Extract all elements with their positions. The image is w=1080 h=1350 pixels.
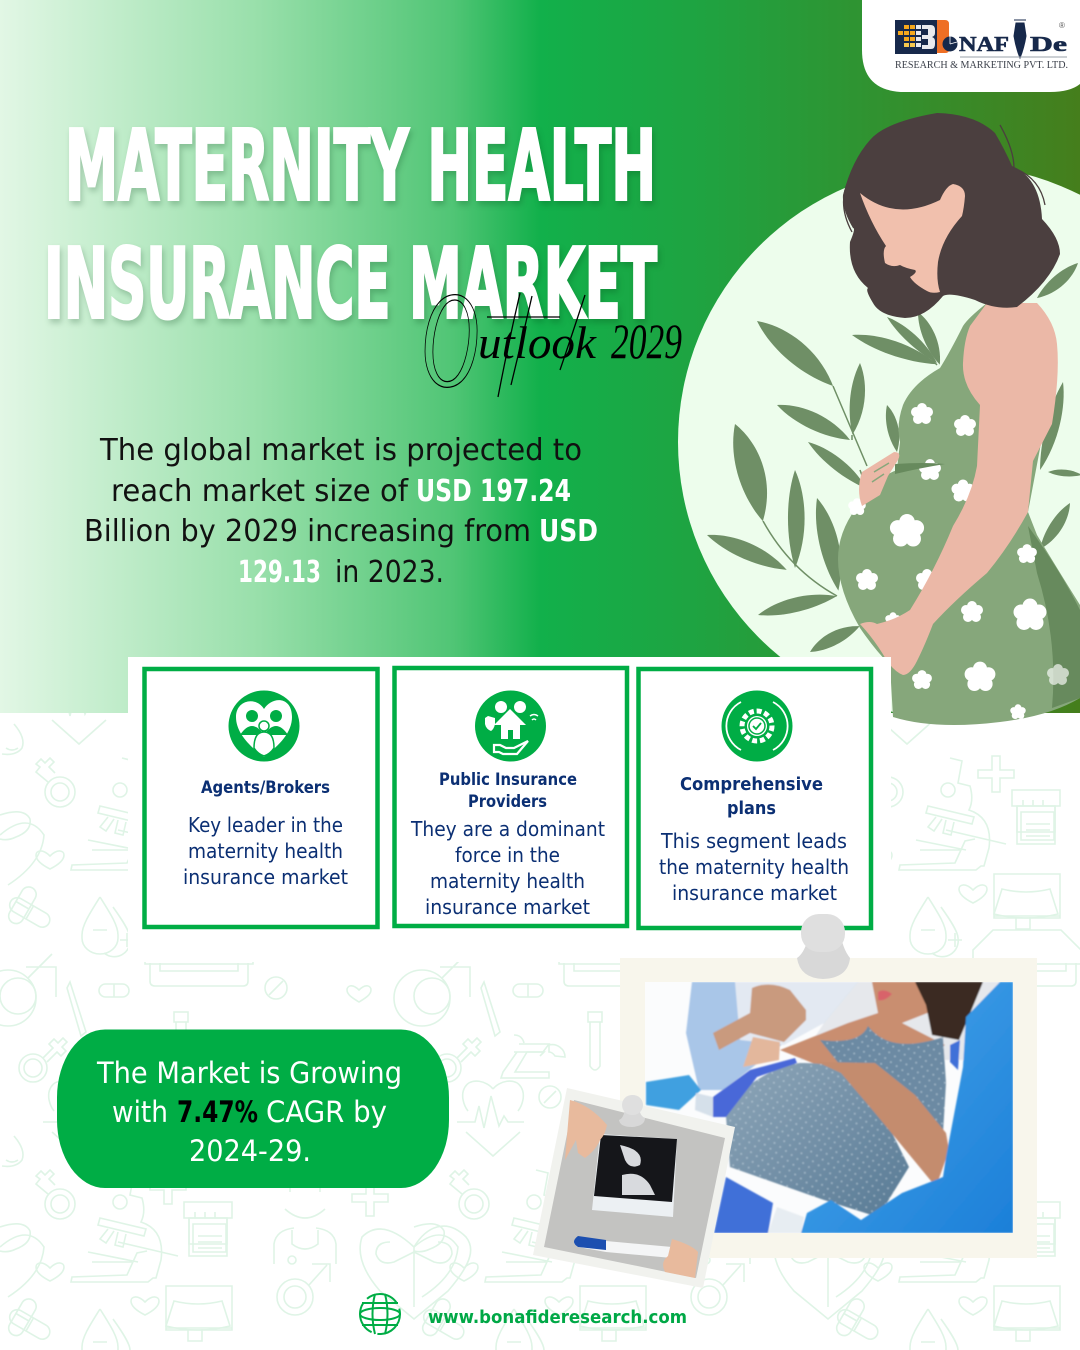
footer: globe icon and website [360,1294,687,1334]
icon: gear with check [722,690,792,762]
dress [838,303,1080,725]
CAGR pill callout: The Market is Growing [96,1056,402,1090]
CAGR pill callout: 2024-29. [189,1134,311,1168]
card: Agents/Brokers: maternity health [188,839,343,863]
card: Public Insurance Providers [394,668,627,926]
icon: globe [360,1294,400,1334]
card: Agents/Brokers: insurance market [183,865,348,889]
market size paragraph: 129.13 [238,555,321,590]
market size paragraph: reach market size of [111,474,409,509]
logo plate [862,0,1080,92]
icon: family heart [228,690,300,762]
push pin [797,914,850,979]
subtitle: Outlook 2029: O [421,263,479,416]
market size paragraph [84,433,598,590]
CAGR pill callout: with [112,1095,168,1129]
icon: house in hand [475,690,546,762]
test right hand [663,1239,698,1278]
hair [843,113,1060,318]
pregnancy test stick [574,1238,672,1258]
card: Comprehensive plans [638,669,871,928]
hair strands [844,125,1045,232]
logo mark: NAF [959,32,1009,56]
card: Public Insurance Providers: They are a dominant [410,817,605,841]
card: Comprehensive plans: plans [727,798,776,819]
CAGR pill callout: 7.47% [177,1095,258,1129]
logo mark: De [1030,32,1067,56]
dress shadow fold [1028,526,1080,708]
market size paragraph: USD [539,514,598,549]
small push pin [619,1095,645,1127]
card: Agents/Brokers: Key leader in the [188,813,343,837]
background pattern of pale medical icons [0,518,1080,1350]
dress flower print [848,403,1069,719]
leaves [704,259,1080,657]
card: Agents/Brokers: Agents/Brokers [201,778,330,798]
card: Public Insurance Providers: Providers [468,792,547,812]
market size paragraph: USD 197.24 [416,474,571,509]
arm and shoulder [860,303,1058,675]
logo mark: RESEARCH & MARKETING PVT. LTD. [895,60,1068,71]
ultrasound left hand [565,1100,607,1160]
pale circle behind woman [678,165,1080,719]
market size paragraph: in 2023. [335,555,444,590]
card: Public Insurance Providers: force in the [455,843,560,867]
subtitle: Outlook 2029: utlook [478,317,598,368]
card: Public Insurance Providers: maternity health [430,869,585,893]
card: Comprehensive plans: insurance market [672,881,837,905]
bust shadow on dress [895,463,945,474]
card: Comprehensive plans: Comprehensive [680,774,823,795]
subtitle: Outlook 2029: 2029 [611,313,682,369]
illustration: pregnant woman with leaves [678,113,1080,725]
card: Public Insurance Providers: insurance market [425,895,590,919]
market size paragraph: Billion by 2029 increasing from [84,514,531,549]
card: Public Insurance Providers: Public Insurance [439,770,577,790]
hand on belly [859,452,899,506]
CAGR pill callout: CAGR by [266,1095,387,1129]
market size paragraph: The global market is projected to [99,433,582,468]
logo mark [895,20,1068,71]
card: Comprehensive plans: the maternity health [659,855,849,879]
footer: globe icon and website: www.bonafideresearch.com [428,1307,687,1328]
CAGR pill callout [57,1030,449,1188]
polaroid: ultrasound and pregnancy test [533,1088,735,1288]
card: Comprehensive plans: This segment leads [660,829,847,853]
hero green gradient band [0,0,1080,713]
card: Agents/Brokers [144,669,378,927]
white panel behind cards [128,657,891,962]
face [860,184,965,293]
subtitle: Outlook 2029 [421,263,682,416]
photo: pregnant patient in clinic [620,914,1037,1258]
title [44,110,657,340]
logo mark: ® [1059,21,1065,30]
